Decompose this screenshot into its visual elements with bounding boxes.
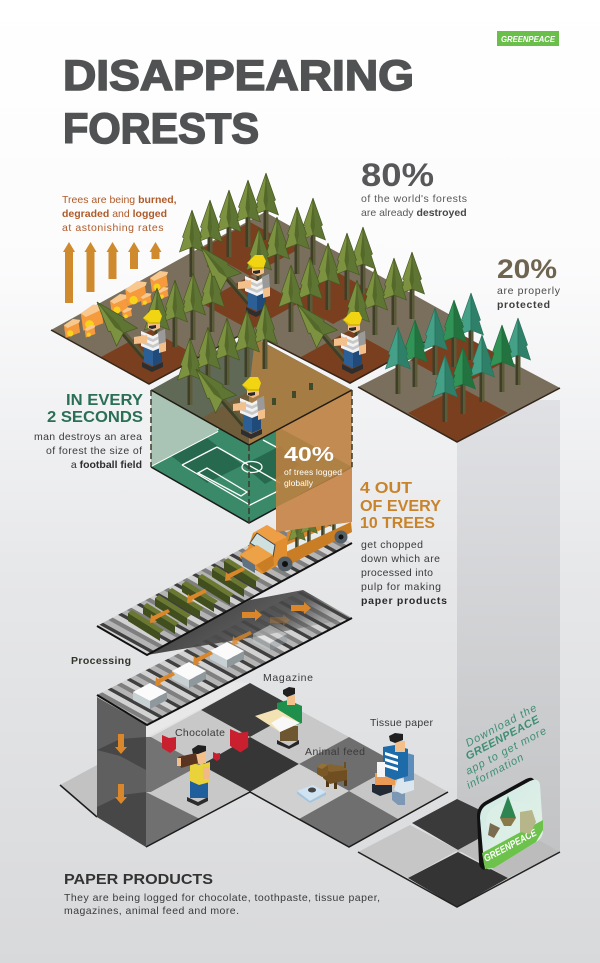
stat: 40% logged: globally <box>284 478 314 488</box>
text: trees being burned: Trees are being burned, <box>62 194 177 206</box>
person: magazine <box>255 687 302 749</box>
logo: Greenpeace: GREENPEACE <box>501 34 555 44</box>
lower conveyor belt <box>97 590 352 725</box>
translucent wall left <box>151 390 218 466</box>
stat: 40% logged: 40% <box>284 444 334 466</box>
forest platform <box>51 212 463 384</box>
stat: 20% protected: are properly <box>497 285 561 297</box>
title <box>63 52 414 153</box>
football field <box>151 412 352 523</box>
text: download the app <box>464 702 549 792</box>
text: 4 out of every 10 trees: processed into <box>361 567 433 579</box>
text: in every 2 seconds: man destroys an area <box>34 431 142 443</box>
text: 4 out of every 10 trees: pulp for making <box>361 581 441 593</box>
stat: 80% destroyed: 80% <box>361 157 434 193</box>
person: tissue paper <box>372 733 414 805</box>
label: animal feed: Animal feed <box>305 746 365 758</box>
text: 4 out of every 10 trees: 4 OUT <box>360 480 412 497</box>
stat: 80% destroyed <box>361 157 467 219</box>
app icon <box>477 778 543 870</box>
right column <box>457 400 560 852</box>
text: download the app: Download the <box>464 702 539 750</box>
stat: 80% destroyed: are already destroyed <box>361 207 467 219</box>
text: in every 2 seconds: 2 SECONDS <box>47 409 143 426</box>
text: trees being burned: at astonishing rates <box>62 222 164 234</box>
text: 4 out of every 10 trees: OF EVERY <box>360 498 441 515</box>
text: 4 out of every 10 trees <box>360 480 447 607</box>
stat: 40% logged <box>284 444 342 488</box>
logs on conveyor <box>128 558 260 641</box>
main floor tiles <box>60 682 448 847</box>
text: paper products: PAPER PRODUCTS <box>64 871 213 888</box>
protected forest tile <box>358 333 560 442</box>
icon: animal feed box <box>297 785 326 803</box>
label: tissue paper: Tissue paper <box>370 717 434 729</box>
fires <box>64 271 168 338</box>
text: in every 2 seconds: IN EVERY <box>66 392 143 409</box>
logo: Greenpeace <box>497 31 559 46</box>
title: FORESTS <box>63 105 259 153</box>
text: in every 2 seconds: of forest the size of <box>46 445 142 457</box>
text: 4 out of every 10 trees: get chopped <box>361 539 423 551</box>
center forest tile <box>151 335 352 445</box>
text: download the app: information <box>465 751 526 792</box>
up arrows: rising rates <box>63 242 162 303</box>
text: download the app: app to get more <box>464 725 549 778</box>
text: trees being burned: degraded and logged <box>62 208 167 220</box>
app icon: GREENPEACE <box>482 828 539 865</box>
text: download the app: GREENPEACE <box>464 713 542 763</box>
upper conveyor belt <box>97 515 352 655</box>
right floor tiles <box>358 799 560 907</box>
text: 4 out of every 10 trees: paper products <box>361 595 447 607</box>
text: in every 2 seconds <box>34 392 143 471</box>
text: 4 out of every 10 trees: 10 TREES <box>360 515 435 532</box>
stat: 80% destroyed: of the world's forests <box>361 193 467 205</box>
lower conveyor pillar <box>97 697 146 847</box>
truck <box>240 493 352 574</box>
person: chocolate <box>177 745 210 806</box>
protected green trees <box>386 293 530 422</box>
text: paper products: They are being logged for chocolate, toothpaste, tissue paper, <box>64 892 380 904</box>
orange column <box>276 390 352 532</box>
label: processing: Processing <box>71 655 131 667</box>
text: 4 out of every 10 trees: down which are <box>361 553 440 565</box>
stat: 20% protected: 20% <box>497 254 557 284</box>
dashed column edges <box>151 390 352 523</box>
text: in every 2 seconds: a football field <box>71 459 142 471</box>
icon: dog <box>317 762 347 789</box>
stat: 20% protected <box>497 254 561 311</box>
text: paper products: magazines, animal feed and more. <box>64 905 239 917</box>
label: chocolate: Chocolate <box>175 727 225 739</box>
title: DISAPPEARING <box>63 52 414 100</box>
icon: red bags <box>162 729 248 761</box>
label: magazine: Magazine <box>263 672 313 684</box>
text: paper products <box>64 871 380 917</box>
stat: 20% protected: protected <box>497 299 550 311</box>
olive forest trees and loggers <box>87 173 424 439</box>
stat: 40% logged: of trees logged <box>284 467 342 477</box>
